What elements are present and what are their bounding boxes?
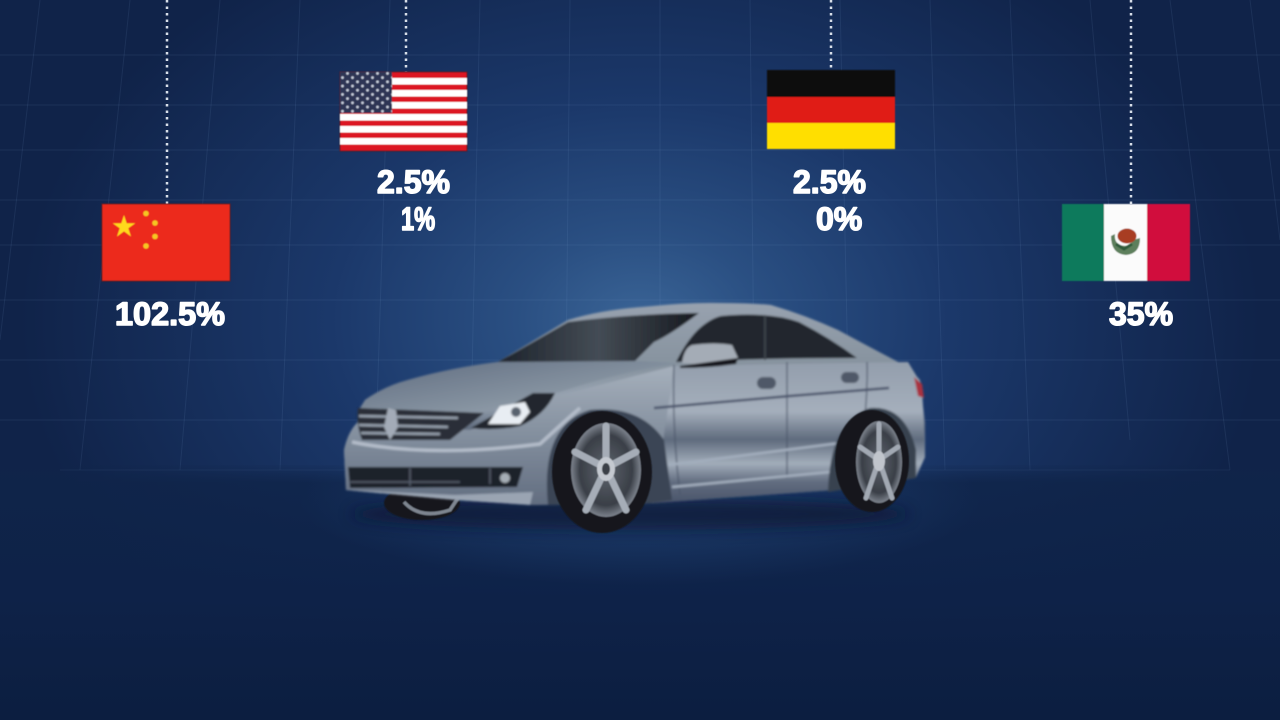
rear wheel (835, 410, 909, 512)
icon: star canton (340, 72, 392, 113)
window pillar (764, 315, 766, 360)
China value: 102.5% (115, 296, 225, 332)
lower sill highlight (668, 443, 840, 487)
door handles (757, 372, 859, 389)
car (344, 303, 925, 533)
front wheel arch (547, 409, 672, 505)
Mexico value: 35% (1109, 296, 1173, 332)
spokes (575, 426, 636, 510)
lower air intake (348, 467, 523, 488)
far front wheel (384, 486, 460, 520)
door lines (674, 362, 867, 495)
taillight (914, 377, 924, 398)
flag: Germany (767, 70, 895, 149)
character line (654, 388, 889, 408)
front wheel (552, 411, 652, 533)
mirror (682, 344, 738, 366)
rear wheel arch (828, 408, 916, 492)
car shadow (350, 498, 910, 530)
icon: small stars (143, 211, 158, 249)
dotted hanging lines (167, 0, 1131, 204)
Germany values: 2.5% (793, 164, 866, 200)
United States values (377, 164, 450, 237)
door panels (654, 362, 925, 503)
car body (344, 303, 925, 505)
Germany values: 0% (816, 201, 862, 237)
grille (358, 408, 484, 440)
United States values: 1% (401, 202, 435, 237)
United States values: 2.5% (377, 164, 450, 200)
bottom bumper lip (346, 490, 533, 505)
front bumper and fender (344, 366, 674, 505)
flag: United States (340, 72, 467, 151)
icon: coat of arms (1111, 228, 1140, 255)
spokes (860, 424, 898, 498)
flag: China (102, 204, 230, 281)
icon: large star (113, 215, 135, 236)
Germany values (793, 164, 866, 237)
bumper highlight (352, 408, 580, 451)
side windows (676, 315, 857, 362)
hood (360, 361, 676, 418)
flag: Mexico (1062, 204, 1190, 281)
windshield (498, 313, 699, 362)
headlight (471, 393, 555, 429)
